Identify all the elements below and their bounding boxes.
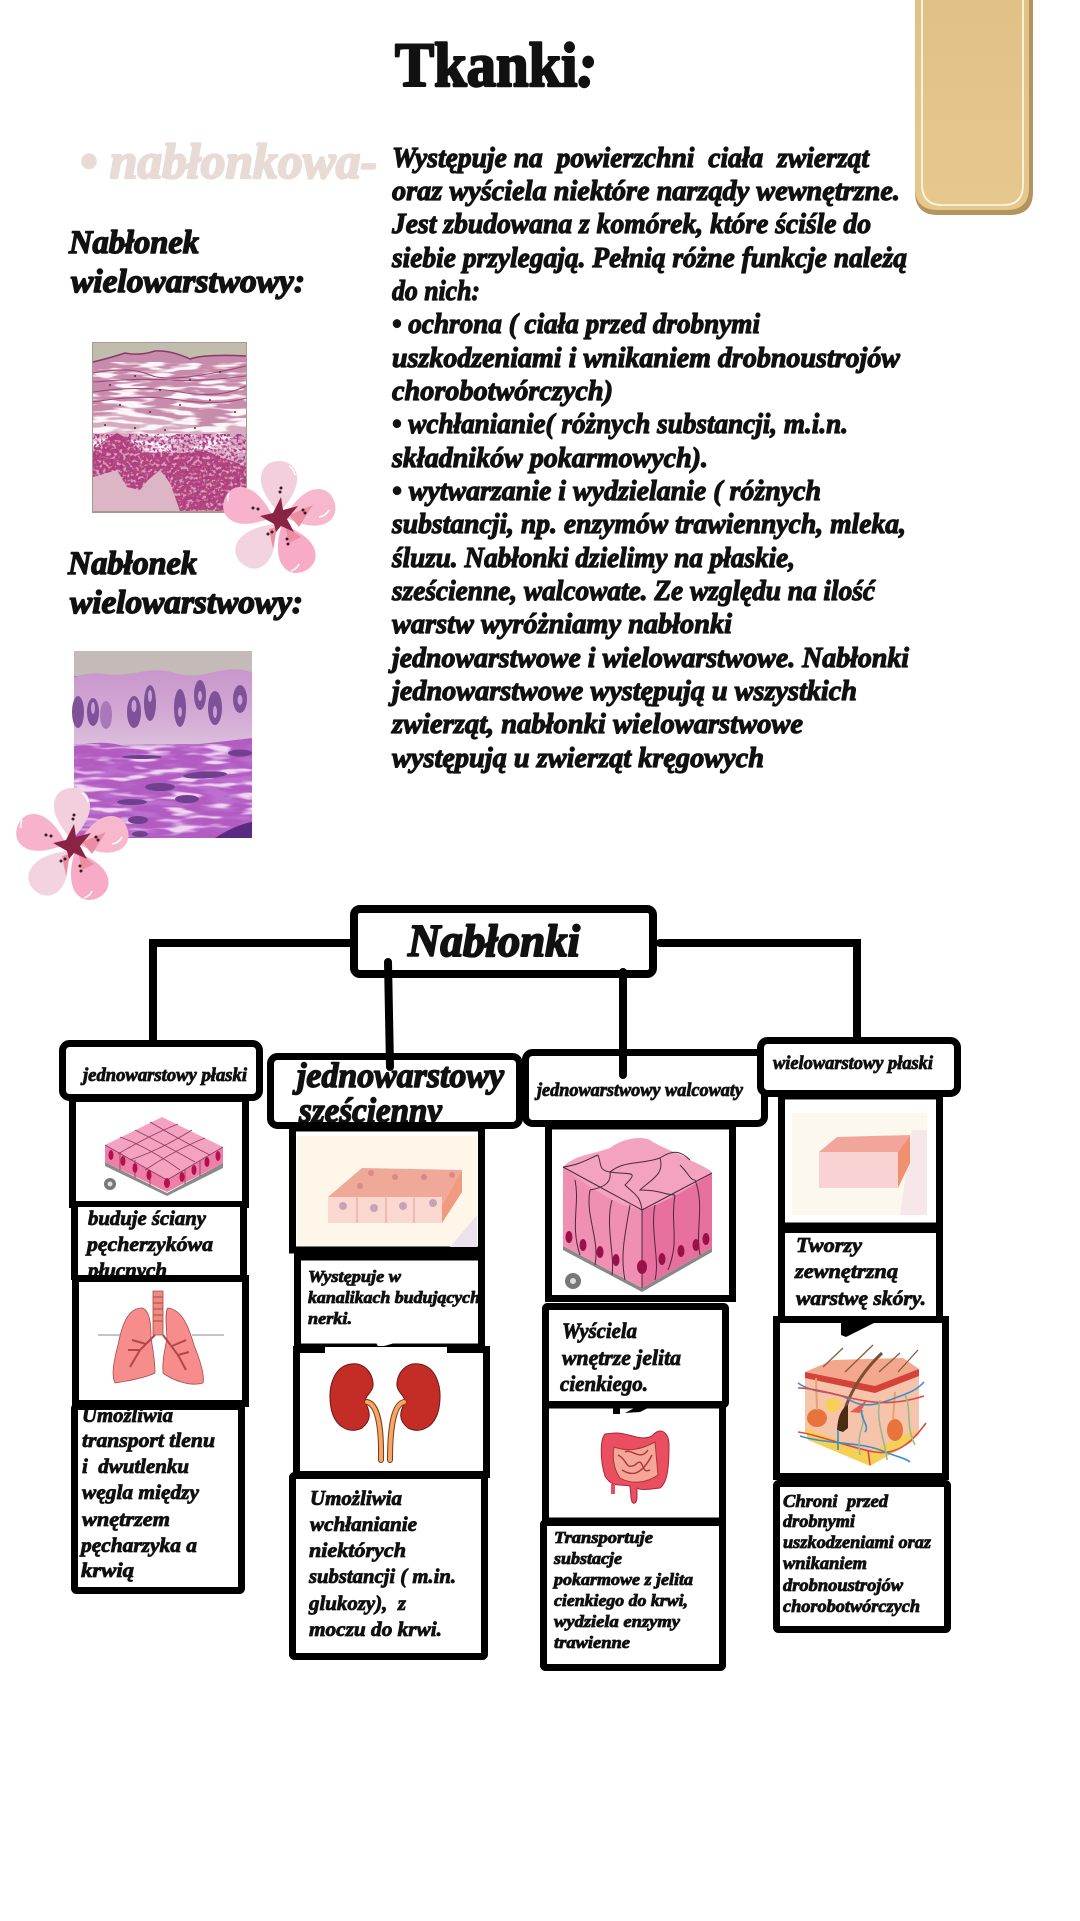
text: Tworzy: [782, 1230, 940, 1320]
text block: description: chorobotwórczych): [392, 376, 613, 407]
micrograph: columnar layer: [72, 651, 252, 838]
text: Wyściela: cienkiego.: [560, 1371, 648, 1396]
image: skin: [776, 1320, 946, 1476]
text block: description: • ochrona ( ciała przed drobnymi: [392, 309, 760, 340]
text block: description: jednowarstwowe występują u wszystkich: [388, 676, 857, 707]
heading: nabłonek 1: wielowarstwowy:: [71, 264, 305, 300]
text: buduje ściany: buduje ściany: [88, 1206, 207, 1230]
panel: Nabłonki root box: [354, 909, 653, 975]
header: jednowarstowy płaski: [80, 1065, 248, 1086]
text: Wyściela: Wyściela: [562, 1318, 637, 1343]
text block: description: • wchłanianie( różnych substancji, m.i.n.: [392, 409, 848, 440]
text block: description: substancji, np. enzymów trawiennych, mleka,: [391, 509, 906, 540]
panel: Nabłonki root box: Nabłonki: [407, 916, 580, 966]
text: Umożliwia transport: transport tlenu: [82, 1428, 215, 1452]
decorative gold tab: [915, 0, 1033, 215]
text: Tworzy: Tworzy: [796, 1233, 863, 1257]
text: Umożliwia transport: pęcharzyka a: [79, 1533, 197, 1557]
text block: description: Jest zbudowana z komórek, które ściśle do: [391, 209, 871, 240]
text: Występuje w kanalikach: nerki.: [308, 1309, 352, 1328]
text: buduje ściany: pęcherzykówa: [85, 1232, 213, 1256]
header: jednowarstowy: [292, 1056, 504, 1095]
header: sześcienny: [298, 1091, 442, 1130]
text: Występuje w kanalikach: Występuje w: [308, 1267, 402, 1286]
text: Chroni przed: drobnoustrojów: [783, 1575, 904, 1595]
text block: description: • wytwarzanie i wydzielanie ( różnych: [392, 476, 821, 507]
header: [270, 1056, 520, 1130]
text: buduje ściany: płucnych: [86, 1258, 167, 1282]
text: Umożliwia wchłanianie: Umożliwia: [310, 1486, 402, 1510]
text: Transportuje: cienkiego do krwi,: [554, 1591, 688, 1610]
heading: nabłonek 1: Nabłonek: [68, 225, 199, 261]
text: Transportuje: trawienne: [554, 1633, 630, 1652]
text: Chroni przed: [776, 1484, 948, 1630]
text: Wyściela: [546, 1306, 726, 1404]
text: Chroni przed: uszkodzeniami oraz: [783, 1532, 931, 1552]
text: Chroni przed: drobnymi: [783, 1511, 855, 1531]
text: Umożliwia wchłanianie: moczu do krwi.: [309, 1617, 442, 1641]
text block: description: warstw wyróżniamy nabłonki: [392, 609, 732, 640]
connector lines left and right: [153, 943, 857, 1042]
image: stratified block: [782, 1096, 940, 1226]
text block: description: śluzu. Nabłonki dzielimy na płaskie,: [391, 543, 795, 574]
column 3: jednowarstwowy walcowaty: [526, 1052, 764, 1668]
text: Chroni przed: chorobotwórczych: [783, 1596, 920, 1616]
text: Transportuje: wydziela enzymy: [554, 1612, 680, 1631]
header: [760, 1040, 958, 1094]
text: Tworzy: warstwę skóry.: [796, 1286, 926, 1310]
text: Chroni przed: wnikaniem: [783, 1553, 867, 1573]
text: Wyściela: wnętrze jelita: [562, 1345, 681, 1370]
text block: description: Występuje na powierzchni ciała zwierząt: [392, 143, 870, 174]
image: kidneys: [296, 1341, 486, 1474]
column 1: jednowarstowy płaski: [62, 1044, 260, 1590]
heading: nabłonek 2: wielowarstwowy:: [70, 585, 303, 621]
column 4: wielowarstowy płaski: [760, 1040, 958, 1630]
text: Umożliwia wchłanianie: wchłanianie: [310, 1512, 417, 1536]
text block: description: do nich:: [392, 276, 480, 307]
text block: description: siebie przylegają. Pełnią różne funkcje należą: [391, 243, 907, 274]
text: Umożliwia transport: i dwutlenku: [82, 1454, 189, 1478]
text block: description: składników pokarmowych).: [391, 443, 708, 474]
text: Umożliwia wchłanianie: glukozy), z: [308, 1591, 407, 1615]
text block: description: występują u zwierząt kręgowych: [392, 743, 764, 774]
text block: description: uszkodzeniami i wnikaniem drobnoustrojów: [392, 343, 900, 374]
text: Chroni przed: Chroni przed: [783, 1491, 889, 1511]
text: Występuje w kanalikach: kanalikach budujących: [308, 1288, 480, 1307]
text: buduje ściany: [74, 1206, 244, 1282]
text: Transportuje: [544, 1522, 722, 1668]
text block: description: zwierząt, nabłonki wielowarstwowe: [391, 709, 803, 740]
heading: nabłonek 1: [68, 225, 305, 300]
text: Umożliwia wchłanianie: niektórych: [309, 1538, 406, 1562]
micrograph: stratified epithelium: [92, 342, 247, 513]
text block: description: jednowarstwowe i wielowarstwowe. Nabłonki: [388, 643, 909, 674]
heading: nabłonkowa: • nabłonkowa-: [80, 133, 377, 189]
text block: description: sześcienne, walcowate. Ze względu na ilość: [391, 576, 877, 607]
header: [526, 1052, 764, 1124]
text: Umożliwia transport: węgla między: [82, 1480, 200, 1504]
text: Umożliwia wchłanianie: substancji ( m.in.: [308, 1564, 456, 1588]
image: squamous cells: [72, 1098, 246, 1204]
image: intestine: [546, 1405, 722, 1521]
text block: description: oraz wyściela niektóre narządy wewnętrzne.: [392, 176, 900, 207]
heading: nabłonek 2: [67, 546, 303, 621]
text block: description: [388, 143, 909, 774]
header: wielowarstowy płaski: [773, 1053, 934, 1074]
text: Transportuje: substacje: [553, 1549, 622, 1568]
text: Transportuje: pokarmowe z jelita: [552, 1570, 694, 1589]
heading: nabłonek 2: Nabłonek: [67, 546, 197, 582]
title: Tkanki:: [395, 32, 597, 100]
text: Tworzy: zewnętrzną: [794, 1259, 898, 1283]
connector lines center: [388, 962, 623, 1075]
header: [62, 1044, 260, 1098]
text: Występuje w kanalikach: [298, 1257, 482, 1347]
text: Umożliwia wchłanianie: [292, 1476, 484, 1656]
image: lungs: [76, 1278, 246, 1404]
header: jednowarstwowy walcowaty: [534, 1080, 744, 1101]
text: Umożliwia transport: Umożliwia: [82, 1403, 173, 1427]
column 2: jednowarstowy sześcienny: [270, 1056, 520, 1656]
text: Transportuje: Transportuje: [554, 1528, 653, 1547]
text: Umożliwia transport: krwią: [81, 1558, 134, 1582]
text: Umożliwia transport: [74, 1403, 242, 1590]
icon: flower 1: [218, 461, 340, 579]
text: Umożliwia transport: wnętrzem: [82, 1507, 170, 1531]
image: cuboidal cells: [292, 1128, 482, 1250]
icon: flower 2: [11, 788, 133, 906]
image: columnar cells: [548, 1126, 732, 1298]
